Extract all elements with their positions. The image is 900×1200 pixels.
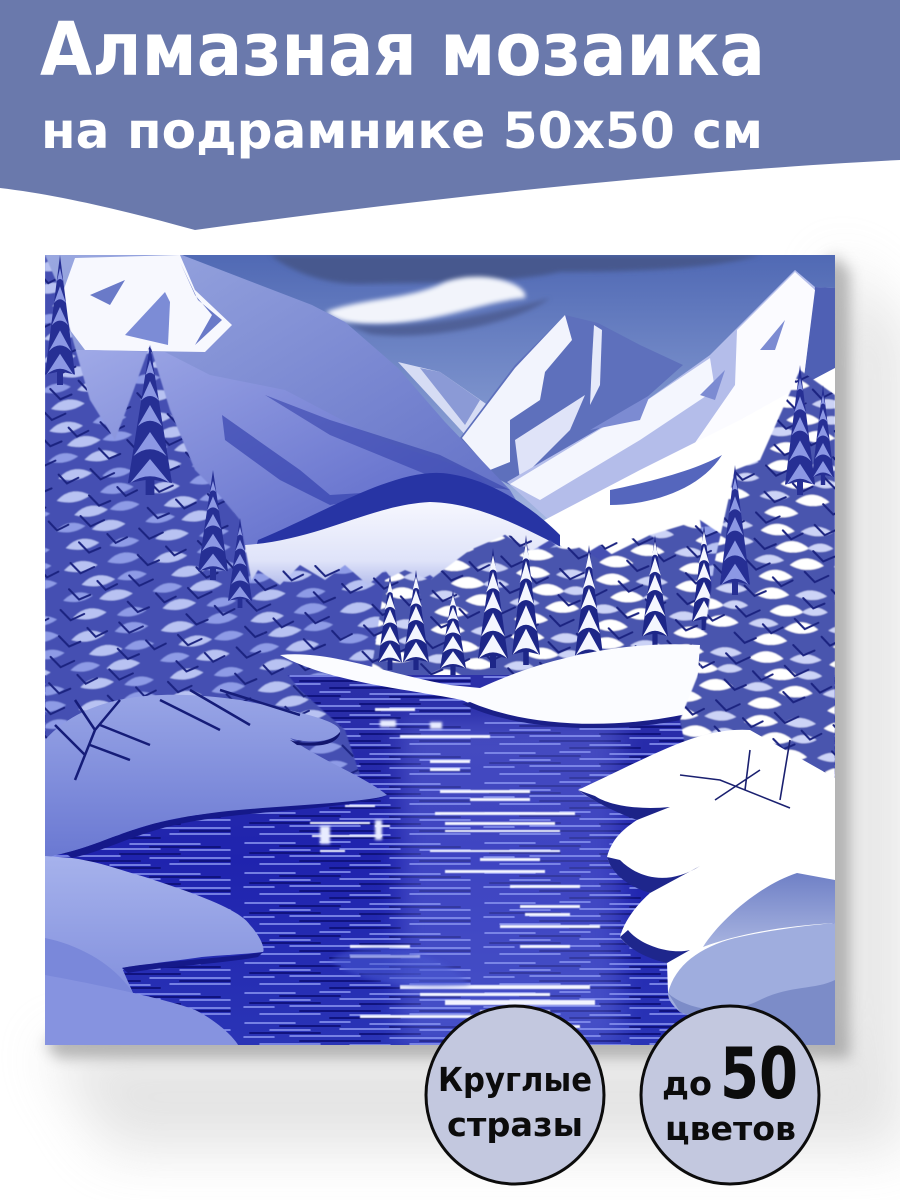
badge: round rhinestones xyxy=(426,1006,604,1184)
distant centre mountain xyxy=(398,315,683,490)
painting: winter river landscape xyxy=(45,255,835,1045)
river xyxy=(45,675,835,1045)
left snow bank with bare bushes xyxy=(45,690,387,858)
central snowy hill with tree ridge xyxy=(245,473,585,600)
right mountain xyxy=(507,270,835,600)
right snow banks xyxy=(578,730,835,1045)
badge: up to 50 colours: до xyxy=(662,1064,712,1103)
left mountain xyxy=(45,255,540,560)
badge: up to 50 colours xyxy=(641,1006,819,1184)
far river bank snow xyxy=(280,644,700,728)
clouds xyxy=(270,255,760,336)
right trees xyxy=(680,365,835,820)
river light reflections xyxy=(310,708,600,1028)
drop shadow of canvas xyxy=(45,255,900,1150)
title: Алмазная мозаика xyxy=(40,7,765,93)
subtitle: на подрамнике 50х50 см xyxy=(41,102,763,160)
left slope with conifer belts xyxy=(45,350,530,600)
badge: round rhinestones: стразы xyxy=(447,1105,583,1144)
bare bush xyxy=(55,690,300,780)
badge: round rhinestones: Круглые xyxy=(438,1060,592,1099)
left foliage mass xyxy=(45,255,360,790)
soft central light on water xyxy=(400,720,620,1045)
lower left snow banks xyxy=(45,856,264,1045)
badge: up to 50 colours: цветов xyxy=(665,1109,796,1148)
background forest band xyxy=(240,520,730,690)
badge: up to 50 colours: 50 xyxy=(720,1033,798,1115)
header band xyxy=(0,0,900,230)
sky xyxy=(45,255,835,555)
